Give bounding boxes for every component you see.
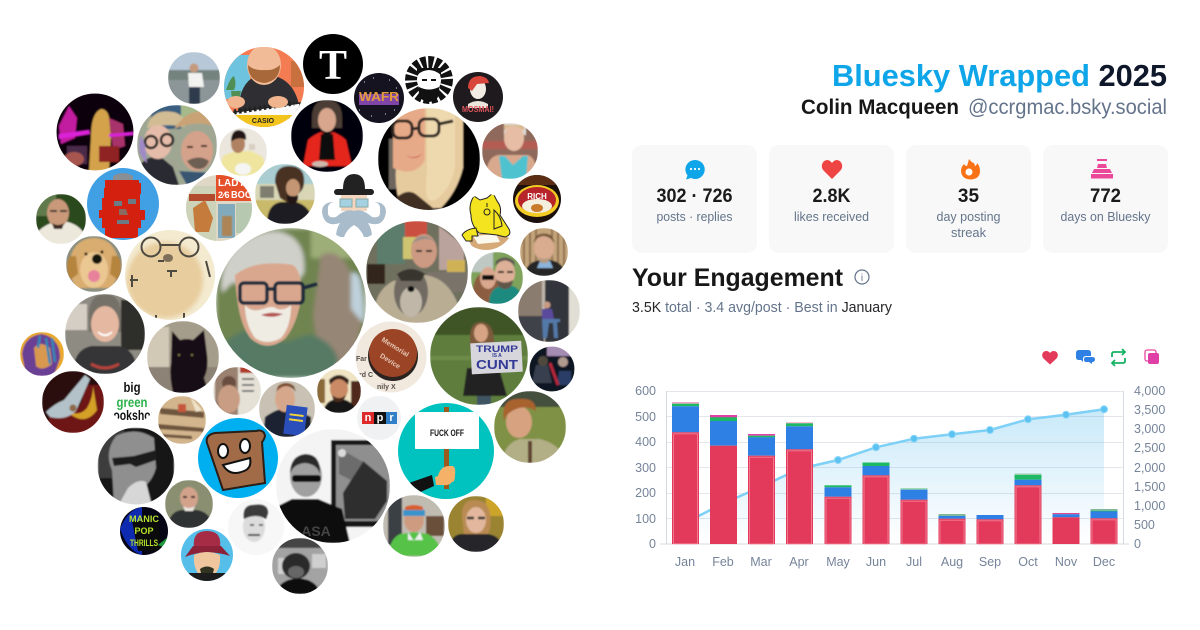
- month labels: Jan: [675, 555, 695, 569]
- right axis labels: 0: [1134, 537, 1141, 551]
- avatar: man in NASA shirt with framed picture: ASA: [301, 523, 331, 539]
- cumulative area: [685, 409, 1104, 544]
- right axis labels: 4,000: [1134, 384, 1165, 398]
- left axis labels: 200: [635, 486, 656, 500]
- user handle: @ccrgmac.bsky.social: [968, 96, 1167, 119]
- avatar: WAFR: [354, 73, 404, 123]
- avatar: goateed man in white shirt: [36, 194, 86, 244]
- avatar: woman holding protest sign: IS A: [492, 353, 502, 359]
- avatar: woman holding protest sign: TRUMP: [476, 344, 518, 354]
- right axis labels: 2,500: [1134, 441, 1165, 455]
- panel: days on Bluesky stat: 772: [1090, 186, 1121, 207]
- avatar: Marmite jar: [513, 175, 561, 223]
- avatar: man on pier: [168, 52, 220, 104]
- month labels: [675, 555, 1115, 569]
- avatar: woman with glasses and autumn leaves: [448, 496, 504, 552]
- panel: likes stat: likes received: [794, 209, 869, 224]
- avatar: golden retriever: [66, 236, 122, 292]
- month labels: Jul: [906, 555, 922, 569]
- avatar: Ladybird book covers: 2⁄6: [218, 190, 230, 200]
- cumulative line: [685, 409, 1104, 523]
- engagement summary: 3.5K total · 3.4 avg/post · Best in January: [632, 300, 893, 316]
- avatar: man with curtains: [520, 228, 568, 276]
- right axis labels: 3,000: [1134, 422, 1165, 436]
- panel: likes stat: [769, 145, 894, 253]
- avatar: NPR logo: r: [389, 412, 394, 424]
- icon: flame: [961, 159, 980, 180]
- avatar: hand holding FUCK OFF sign: FUCK OFF: [430, 428, 464, 439]
- avatar: man in green shirt: [383, 495, 445, 557]
- avatar: sketched man portrait: [228, 499, 284, 555]
- avatar: Big Green Bookshop logo: big: [124, 379, 140, 395]
- avatar: Ladybird book covers: LADY: [218, 178, 245, 189]
- month labels: Aug: [941, 555, 963, 569]
- legend icons: [1042, 349, 1159, 366]
- avatar: NPR logo: p: [377, 412, 384, 424]
- left axis labels: 0: [649, 537, 656, 551]
- avatar: Big Green Bookshop logo: bookshop: [107, 407, 157, 423]
- avatar: central portrait of grey-haired man with glasses: [216, 228, 366, 378]
- avatar: man in grainy black and white: [272, 538, 328, 594]
- left axis labels: 500: [635, 410, 656, 424]
- avatar: couple with sunglasses: [471, 252, 523, 304]
- avatar: Memorial Device badge: nily X: [377, 384, 396, 391]
- right axis labels: 2,000: [1134, 461, 1165, 475]
- avatar: man with schnauzer dog: [366, 221, 468, 323]
- title: Bluesky Wrapped 2025: [832, 58, 1167, 93]
- panel: days on Bluesky stat: days on Bluesky: [1060, 209, 1151, 224]
- avatar: yellow cartoon cat: [462, 194, 510, 250]
- avatar: old newspaper map: [158, 396, 206, 444]
- avatar: Manic Pop Thrills: MANIC: [129, 514, 160, 524]
- month labels: Sep: [979, 555, 1001, 569]
- avatar: Manic Pop Thrills: THRILLS: [130, 538, 158, 548]
- avatar: black and white bearded face: [405, 56, 453, 104]
- avatar: Manic Pop Thrills: POP: [134, 526, 154, 536]
- right axis labels: 1,000: [1134, 499, 1165, 513]
- panel: posts and replies stat: [632, 145, 757, 253]
- avatar: Ladybird book covers: BOO: [231, 190, 252, 201]
- cumulative points: [834, 406, 1108, 464]
- right axis labels: 1,500: [1134, 480, 1165, 494]
- heading: Your Engagement: Your Engagement: [632, 264, 844, 292]
- panel: likes stat: 2.8K: [812, 186, 851, 207]
- avatar: woman holding protest sign: [430, 307, 528, 405]
- panel: posting streak stat: 35: [958, 186, 979, 207]
- panel: days on Bluesky stat: [1043, 145, 1168, 253]
- avatar: bearded man in field: [255, 164, 315, 224]
- icon: info: i: [861, 273, 863, 284]
- avatar: bearded man portrait: [317, 369, 361, 413]
- avatar: Big Green Bookshop logo: [114, 382, 152, 420]
- bars: [672, 402, 1118, 544]
- month labels: Jun: [866, 555, 886, 569]
- avatar cloud: [20, 34, 580, 594]
- avatar: guitar closeup: [42, 371, 104, 433]
- avatar: man in NASA shirt with framed picture: [276, 429, 390, 543]
- month labels: May: [826, 555, 851, 569]
- avatar: man with glasses in black and white: [98, 428, 174, 506]
- avatar: sketched bear with glasses: [125, 230, 215, 323]
- avatar: small boy in field: [494, 391, 566, 463]
- avatar: New York Times logo: [303, 34, 363, 94]
- avatar: Manic Pop Thrills: [120, 507, 168, 555]
- icon: likes legend heart: [1042, 351, 1058, 364]
- avatar: New York Times logo: T: [319, 43, 347, 89]
- left axis labels: 100: [635, 512, 656, 526]
- avatar: bowler hat and moustache logo: [321, 174, 387, 240]
- avatar: Big Green Bookshop logo: green: [116, 394, 148, 410]
- chart: monthly engagement stacked bars with cumulative line: [635, 384, 1165, 569]
- icon: replies legend bubbles: [1076, 350, 1095, 364]
- left axis labels: 600: [635, 384, 656, 398]
- avatar: Mosmai: MOSMAI!: [462, 105, 494, 114]
- icon: info: [855, 270, 869, 284]
- avatar: man holding blue book: [259, 381, 315, 437]
- avatar: Mosmai: [453, 72, 503, 122]
- right axis labels: [1134, 384, 1165, 551]
- right axis labels: 3,500: [1134, 403, 1165, 417]
- avatar: cartoon man in red bucket hat: [181, 529, 233, 581]
- avatar: book cover with man: [213, 367, 261, 415]
- icon: quotes legend squares: [1145, 350, 1159, 364]
- avatar: hand holding FUCK OFF sign: [398, 403, 494, 499]
- panel: posting streak stat: streak: [951, 225, 986, 240]
- avatar: Memorial Device badge: Memorial: [380, 337, 410, 359]
- month labels: Feb: [712, 555, 734, 569]
- avatar: smiling woman: [65, 294, 145, 374]
- avatar: Memorial Device badge: rd C: [359, 372, 373, 379]
- avatar: guitarists on stage: [529, 346, 575, 392]
- left axis labels: 300: [635, 461, 656, 475]
- avatar: cartoon man at Casio keyboard: [224, 45, 304, 127]
- avatar: woman holding protest sign: CUNT: [476, 357, 518, 372]
- icon: heart: [822, 160, 842, 179]
- avatar: WAFR: WAFR: [359, 89, 400, 104]
- left axis labels: 400: [635, 435, 656, 449]
- avatar: Memorial Device badge: Device: [378, 353, 401, 371]
- icon: birthday cake: [1091, 159, 1113, 178]
- avatar: woman in blue top: [482, 123, 538, 179]
- month labels: Oct: [1018, 555, 1038, 569]
- avatar: NPR logo: [357, 396, 401, 440]
- panel: posting streak stat: day posting: [936, 209, 1000, 224]
- panel: posting streak stat: [906, 145, 1031, 253]
- avatar: cartoon man at Casio keyboard: CASIO: [252, 118, 275, 125]
- avatar: red pixel mask: [87, 168, 159, 240]
- avatar: band on purple stage: [56, 93, 134, 171]
- avatar: smiling toast cartoon: [198, 418, 278, 498]
- avatar: Ladybird book covers: [186, 175, 252, 241]
- icon: reposts legend arrows: [1112, 349, 1125, 366]
- panel: posts and replies stat: 302 · 726: [656, 186, 732, 207]
- avatar: buildings and seated man: [518, 280, 580, 342]
- avatar: colourful portrait painting: [20, 332, 64, 376]
- avatar: Memorial Device badge: [355, 321, 427, 393]
- avatar: man in yellow jacket with tea: [219, 128, 267, 176]
- avatar: bald man with rucksack: [165, 480, 213, 528]
- avatar: woman in red jacket: [291, 100, 363, 172]
- avatar: NPR logo: n: [365, 412, 372, 424]
- avatar: black cat: [147, 321, 219, 393]
- month labels: Dec: [1093, 555, 1115, 569]
- left axis labels: [635, 384, 656, 551]
- avatar: Marmite jar: RICH: [527, 192, 547, 201]
- user name: Colin Macqueen: [801, 96, 959, 119]
- right axis labels: 500: [1134, 518, 1155, 532]
- avatar: blonde woman with glasses: [378, 108, 480, 214]
- month labels: Apr: [789, 555, 809, 569]
- avatar: couple in straw hats: [137, 105, 217, 185]
- month labels: Nov: [1055, 555, 1078, 569]
- panel: posts and replies stat: posts · replies: [656, 209, 733, 224]
- avatar: Memorial Device badge: Far: [356, 356, 367, 363]
- icon: speech bubble: [685, 160, 705, 180]
- month labels: Mar: [750, 555, 772, 569]
